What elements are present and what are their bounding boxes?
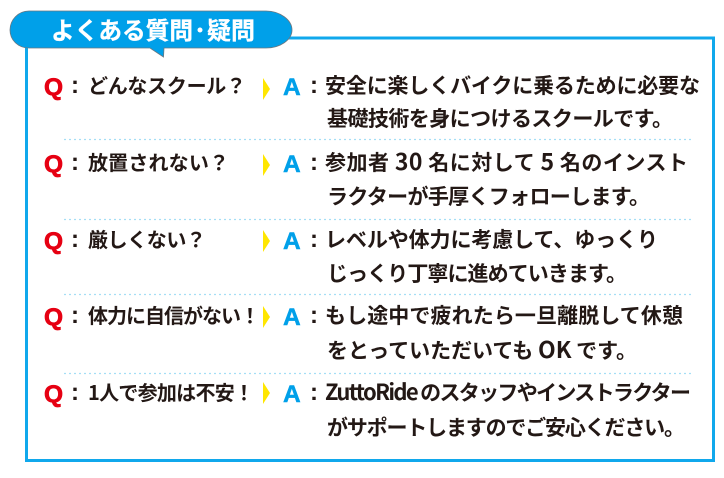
row 1: 安全に楽しくバイクに乗るために必要な <box>325 70 700 100</box>
row 4 <box>44 300 683 365</box>
row 1 <box>44 70 700 133</box>
row 2: : <box>71 149 79 176</box>
row 1: : <box>71 72 79 99</box>
row 4: : <box>310 302 318 329</box>
row 2: 放置されない？ <box>88 147 229 176</box>
row 1: A <box>283 74 301 101</box>
row 1: 基礎技術を身につけるスクールです。 <box>327 103 673 133</box>
row 5: Q <box>44 381 63 408</box>
row 3 <box>44 224 658 288</box>
row 3: じっくり丁寧に進めていきます。 <box>327 258 627 288</box>
row 3: レベルや体力に考慮して、ゆっくり <box>325 224 658 254</box>
row 5: がサポートしますのでご安心ください。 <box>327 412 685 442</box>
row 2: 参加者 30 名に対して 5 名のインスト <box>325 143 688 177</box>
row 5: : <box>310 379 318 406</box>
row 3: : <box>310 226 318 253</box>
row 2 <box>44 143 688 211</box>
row 5: ZuttoRide のスタッフやインストラクター <box>325 375 691 407</box>
title banner: よくある質問 <box>51 11 193 46</box>
row 1: Q <box>44 74 63 101</box>
row 4: 体力に自信がない！ <box>88 300 260 329</box>
row 3: : <box>71 226 79 253</box>
row 5: A <box>283 381 301 408</box>
row 2: Q <box>44 151 63 178</box>
row 1: どんなスクール？ <box>88 70 246 99</box>
row 2: ラクターが手厚くフォローします。 <box>327 181 650 211</box>
row 5 <box>44 375 691 442</box>
row 4: A <box>283 304 301 331</box>
row 5: : <box>71 379 79 406</box>
row 5: 1人で参加は不安！ <box>88 377 254 406</box>
row 3: A <box>283 228 301 255</box>
row 3: 厳しくない？ <box>88 224 206 253</box>
row 3: Q <box>44 228 63 255</box>
row 2: : <box>310 149 318 176</box>
title banner <box>10 11 292 57</box>
row 4: をとっていただいても OK です。 <box>327 331 637 365</box>
row 4: : <box>71 302 79 329</box>
row 4: Q <box>44 304 63 331</box>
row 2: A <box>283 151 301 178</box>
title banner: 疑問 <box>207 11 255 46</box>
row 4: もし途中で疲れたら一旦離脱して休憩 <box>325 300 683 330</box>
row 1: : <box>310 72 318 99</box>
